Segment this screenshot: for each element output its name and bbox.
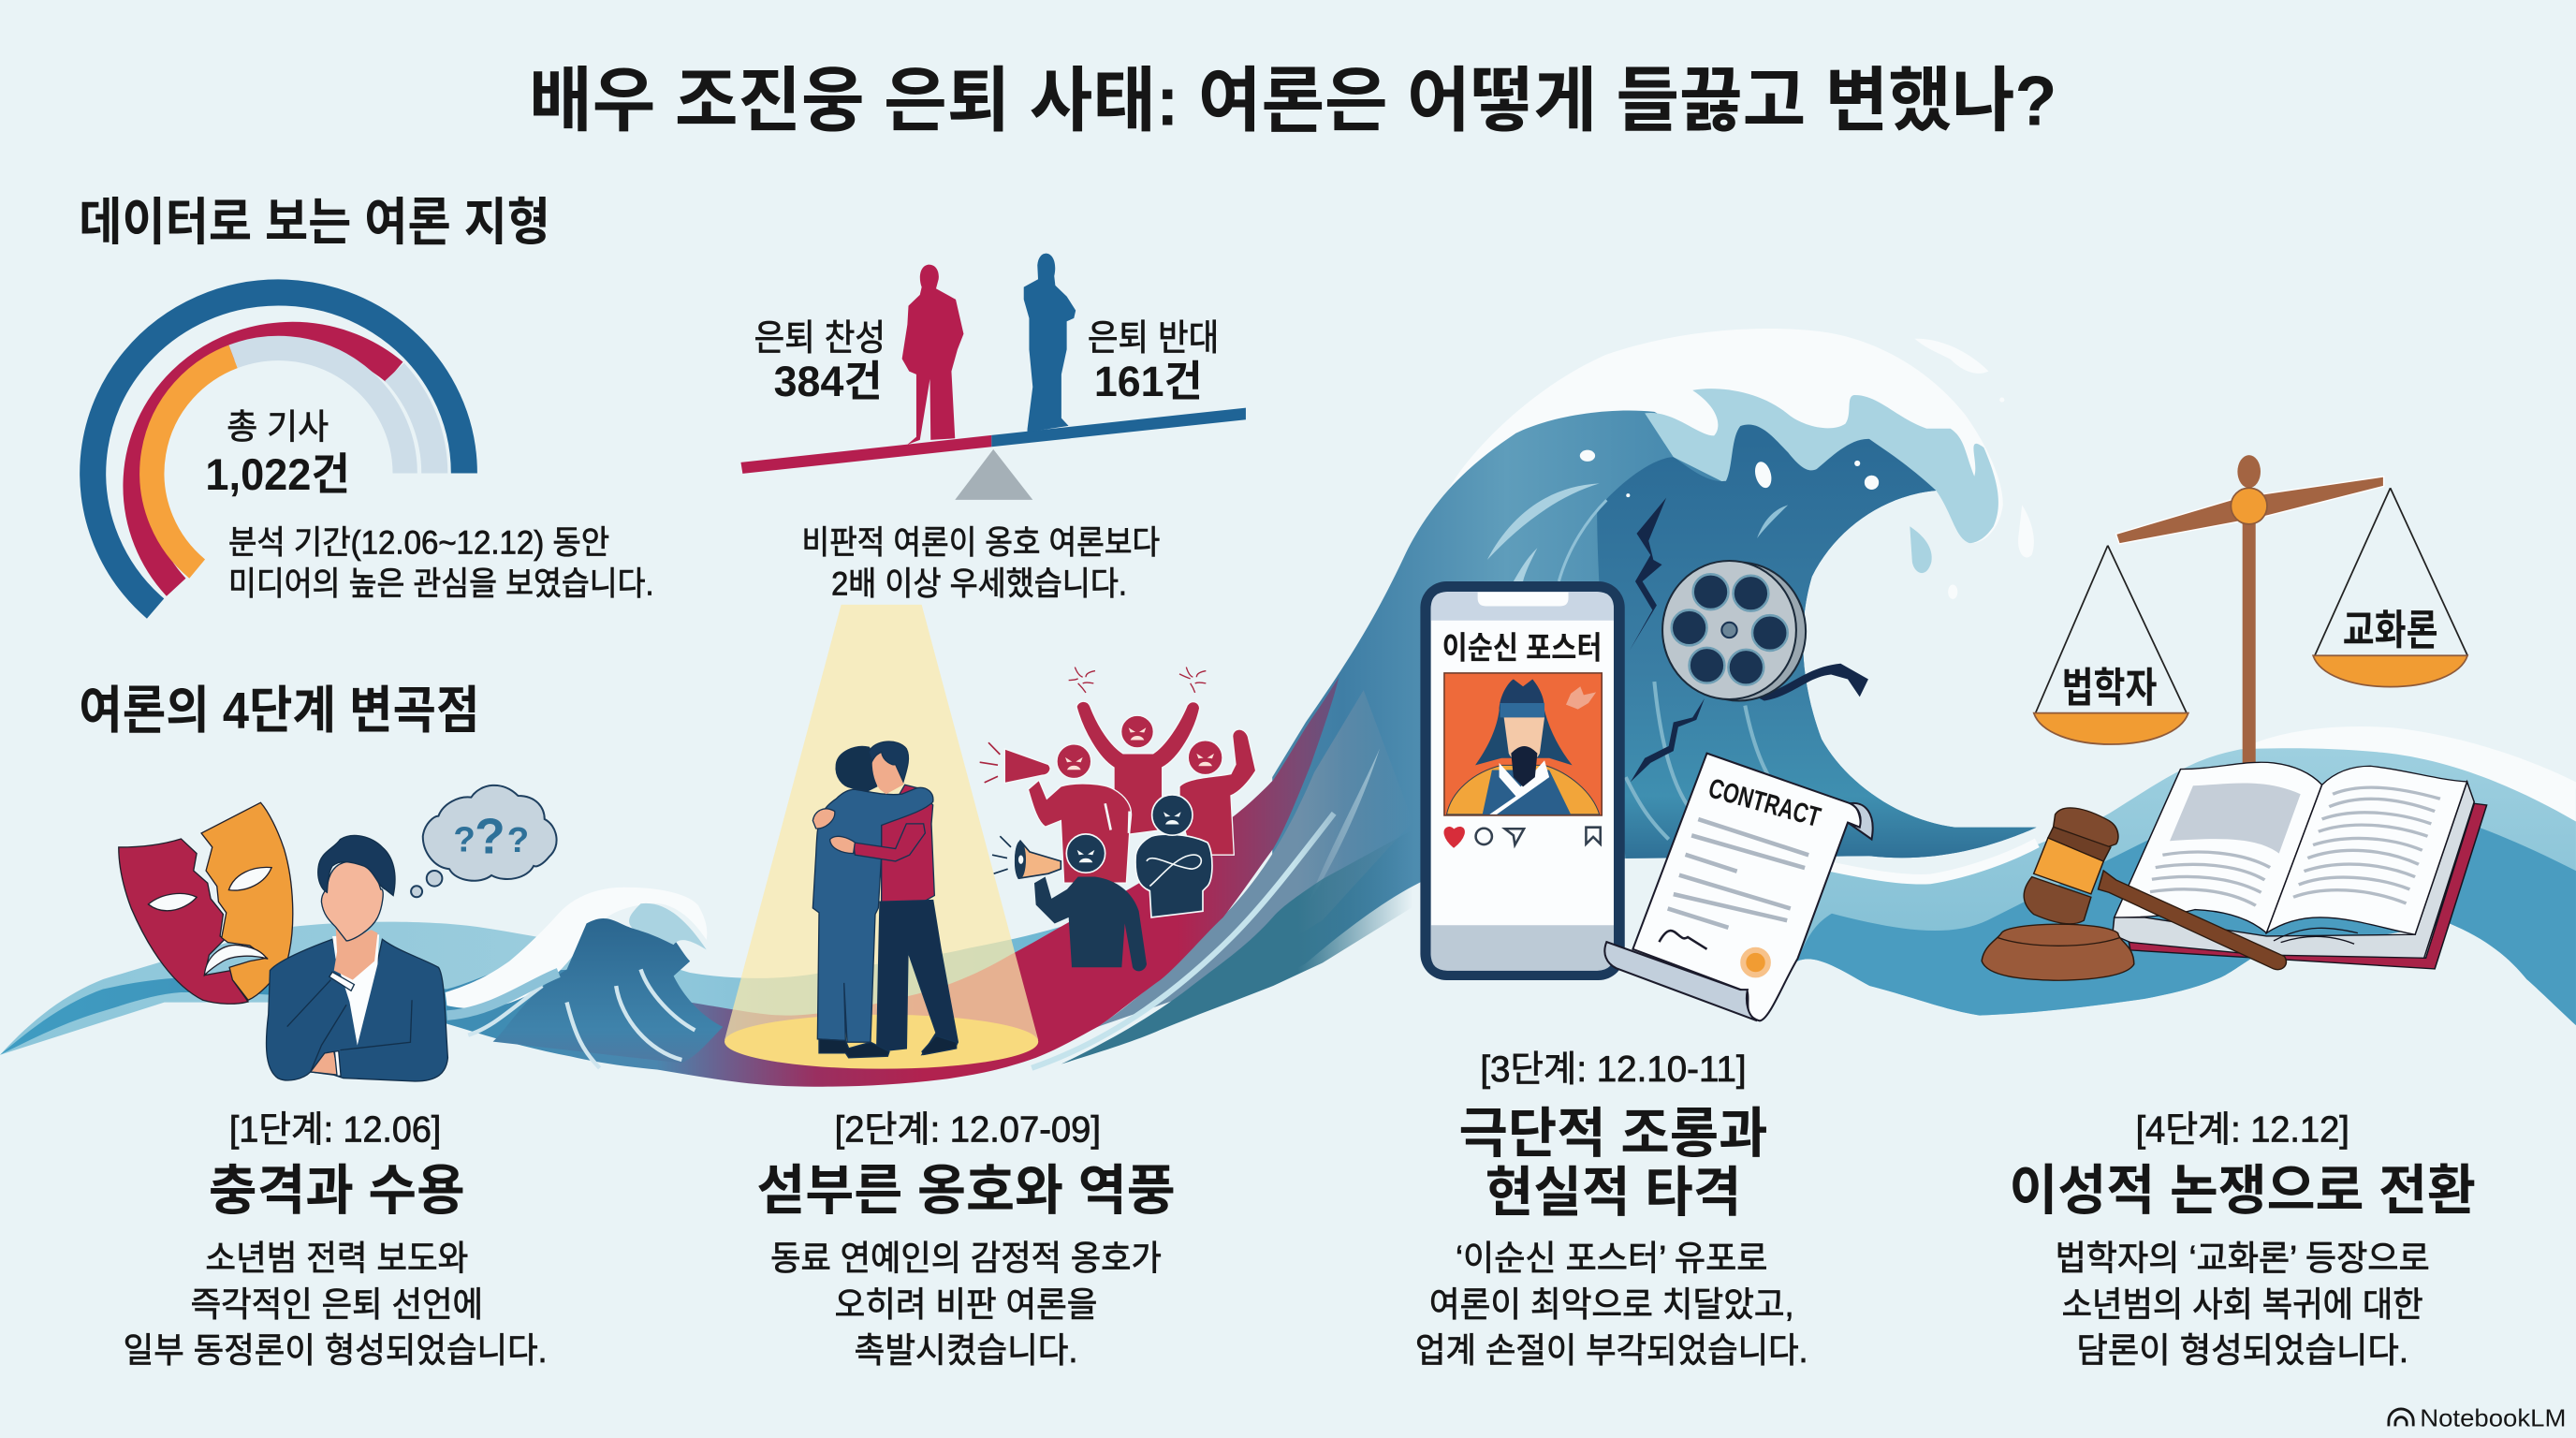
gauge description: 미디어의 높은 관심을 보였습니다.: [228, 565, 654, 602]
stage 2 text: 섣부른 옹호와 역풍: [756, 1162, 1176, 1222]
stage 3 text: [1415, 1049, 1808, 1370]
stage 2 text: 촉발시켰습니다.: [855, 1331, 1077, 1370]
stage 3 text: ‘이순신 포스터’ 유포로: [1456, 1240, 1767, 1278]
stage 1 text: [1단계: 12.06]: [229, 1110, 441, 1151]
gauge description: [228, 524, 654, 602]
stage 4 text: 담론이 형성되었습니다.: [2076, 1331, 2408, 1370]
stage 3 text: 극단적 조롱과: [1459, 1104, 1767, 1164]
stage 1 text: [124, 1110, 547, 1370]
seesaw description: 2배 이상 우세했습니다.: [831, 565, 1127, 602]
icon: angry crowd with megaphones: [980, 668, 1256, 971]
stage 3 text: 업계 손절이 부각되었습니다.: [1415, 1331, 1808, 1370]
big wave: controversy peak: [1272, 329, 2037, 983]
wave ribbon: flowing public opinion: [0, 677, 1412, 1087]
stage 1 text: 소년범 전력 보도와: [205, 1240, 468, 1278]
navy megaphone: [1016, 841, 1061, 878]
stage 1 text: 즉각적인 은퇴 선언에: [191, 1285, 483, 1324]
title: 배우 조진웅 은퇴 사태: 여론은 어떻게 들끓고 변했나?: [529, 61, 2056, 139]
gauge label: 1,022건: [205, 450, 350, 500]
stage 3 text: 현실적 타격: [1486, 1163, 1741, 1223]
NotebookLM logo: NotebookLM: [2420, 1405, 2566, 1431]
stage 2 text: 동료 연예인의 감정적 옹호가: [770, 1240, 1162, 1278]
icon: phone with poster: [1420, 581, 1625, 980]
stage 2 text: [2단계: 12.07-09]: [835, 1110, 1101, 1151]
small wave: first stage ripple: [446, 888, 723, 1068]
label: retire against: 161건: [1094, 358, 1203, 405]
icon: thought bubble: ?: [507, 820, 529, 860]
icon: split theatre mask: [119, 802, 293, 1004]
label: retire for: 384건: [774, 358, 883, 405]
scale label: left pan: 법학자: [2062, 665, 2157, 711]
icon: thinking man: [267, 835, 447, 1081]
seesaw description: [802, 524, 1160, 602]
icon: contract scroll: [1604, 754, 1873, 1020]
wave body: [1272, 411, 2037, 983]
icon: embracing people: [812, 741, 958, 1058]
gauge chart: total articles: [93, 292, 464, 609]
icon: film reel: [1662, 561, 1868, 700]
stage 3 text: 여론이 최악으로 치달았고,: [1429, 1285, 1794, 1324]
scale label: right pan: 교화론: [2343, 608, 2438, 653]
seesaw description: 비판적 여론이 옹호 여론보다: [802, 524, 1160, 561]
stage 1 text: 일부 동정론이 형성되었습니다.: [124, 1331, 547, 1370]
navy protesters: [1034, 795, 1212, 971]
silhouette: blue: [1024, 254, 1076, 433]
anger burst marks: [1069, 668, 1206, 693]
silhouette: red: [902, 265, 963, 445]
heading: four stages: 여론의 4단계 변곡점: [79, 682, 480, 739]
fulcrum: [955, 449, 1032, 500]
wave dark interior: [1597, 424, 2037, 858]
stage 4 text: [2009, 1110, 2476, 1370]
poster: Yi Sun-sin: [1444, 673, 1602, 815]
stage 4 text: 소년범의 사회 복귀에 대한: [2062, 1285, 2423, 1324]
poster caption: 이순신 포스터: [1442, 631, 1603, 667]
icon: thought bubble: [411, 785, 557, 897]
right wave band: [1797, 726, 2576, 1025]
stage 2 text: [756, 1110, 1176, 1370]
gauge description: 분석 기간(12.06~12.12) 동안: [228, 524, 609, 561]
heading: data section: 데이터로 보는 여론 지형: [79, 194, 550, 251]
stage 4 text: 법학자의 ‘교화론’ 등장으로: [2056, 1240, 2430, 1278]
label: retire against: [1088, 318, 1219, 405]
stage 1 text: 충격과 수용: [209, 1162, 465, 1222]
icon: cracks: [1630, 498, 1705, 782]
gauge label: 총 기사: [227, 408, 329, 447]
icon: open book: [2113, 762, 2487, 969]
stage 4 text: 이성적 논쟁으로 전환: [2009, 1162, 2476, 1222]
wave foam white crest: [1449, 329, 2003, 543]
icon: gavel: [1982, 808, 2286, 980]
gauge label: [205, 408, 350, 500]
contract heading: CONTRACT: [1705, 772, 1823, 833]
label: retire for: 은퇴 찬성: [754, 318, 886, 359]
icon: balance scale: [2034, 455, 2467, 764]
label: retire for: [754, 318, 886, 405]
stage 3 text: [3단계: 12.10-11]: [1480, 1049, 1747, 1090]
icon: thought bubble: ?: [453, 819, 476, 859]
icon: thought bubble: ?: [475, 810, 505, 865]
foam light blue: [1645, 389, 1998, 543]
label: retire against: 은퇴 반대: [1088, 318, 1219, 359]
stage 2 text: 오히려 비판 여론을: [835, 1285, 1097, 1324]
seesaw chart: for vs against: [740, 254, 1246, 500]
post action icons: [1445, 828, 1601, 846]
spotlight: [724, 605, 1038, 1069]
stage 4 text: [4단계: 12.12]: [2136, 1110, 2349, 1151]
red protesters: [1004, 701, 1256, 883]
